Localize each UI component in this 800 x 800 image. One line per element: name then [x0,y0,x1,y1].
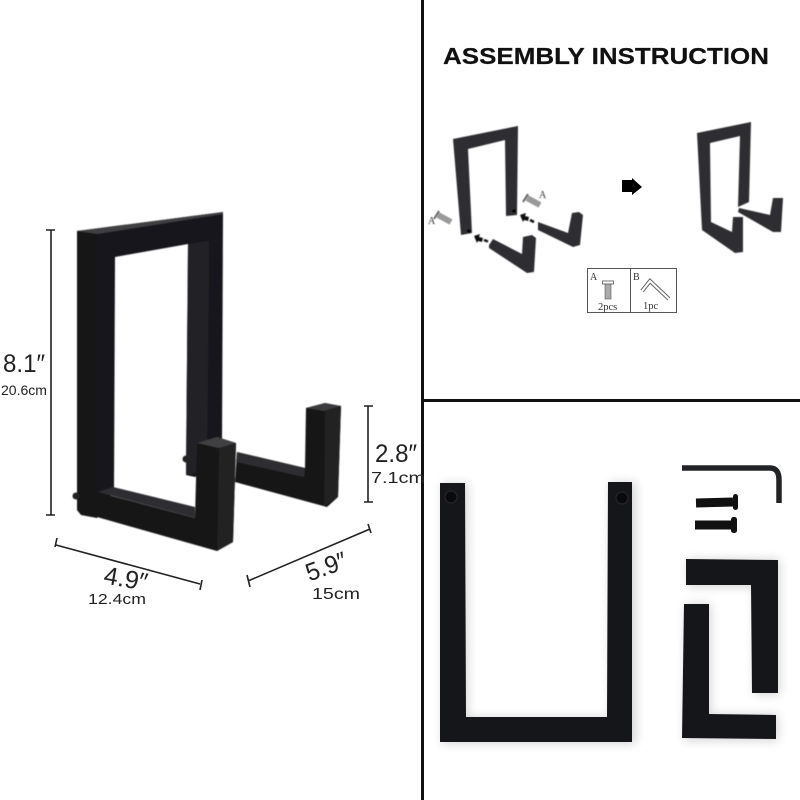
arrow [622,178,642,195]
parts legend: A [590,272,598,283]
panel: assembly instruction [428,43,783,313]
hex key [682,468,779,503]
dimension: width [55,538,202,608]
back L foot [235,403,341,507]
screw right [523,190,547,205]
right foot [538,212,583,247]
dimension: foot height: 2.8″ [375,440,417,468]
parts legend: 2pcs [598,302,617,313]
main frame [77,212,223,518]
front L foot [97,437,236,551]
U frame [440,482,632,742]
part shadows [442,482,780,744]
parts legend: B [633,272,640,283]
dimension: depth [247,524,371,603]
left foot [489,235,536,273]
icon: screw [602,281,614,299]
frame [453,126,518,235]
dimension: height: 20.6cm [1,383,47,398]
dimension: foot height [364,406,425,502]
heading: ASSEMBLY INSTRUCTION [443,43,769,69]
dimension: height: 8.1″ [3,350,45,378]
screw left: A [428,216,436,227]
parts legend: 1pc [643,301,658,312]
dimension: width: 12.4cm [88,592,146,608]
screw left [428,211,451,227]
panel: assembled stand with dimensions [1,212,425,608]
assembled stand [697,122,783,253]
icon: hex key [642,281,669,299]
right arrow [520,213,534,222]
lower L piece [682,604,776,739]
dimension: height [1,230,55,515]
screw right: A [539,190,547,201]
dimension: width: 4.9″ [102,562,150,597]
panel: parts photo [440,468,780,744]
parts legend [588,268,676,313]
stand photo [72,212,341,551]
upper L piece [686,559,778,693]
dimension: depth: 15cm [312,586,360,603]
screws [695,494,738,533]
dimension: foot height: 7.1cm [371,470,425,487]
exploded parts diagram [428,126,583,273]
left arrow [474,234,488,243]
dimension: depth: 5.9″ [302,547,351,587]
panel dividers [421,0,800,800]
